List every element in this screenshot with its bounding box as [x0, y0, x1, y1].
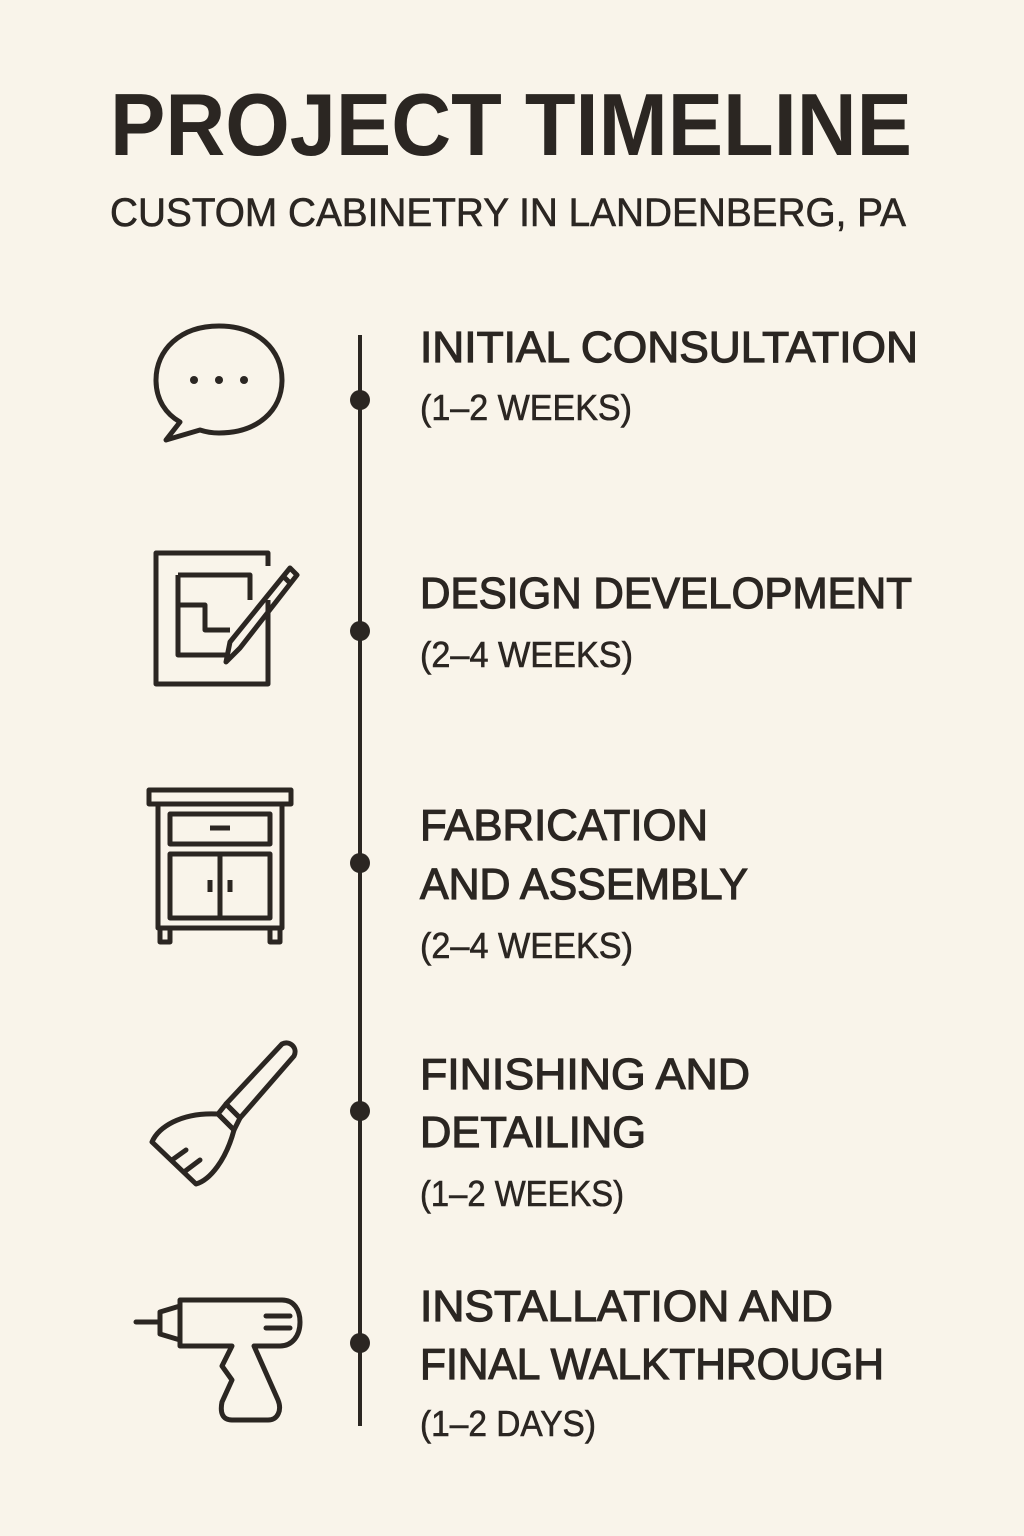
timeline line [350, 335, 370, 1426]
step 4 text: (1–2 WEEKS) [420, 1173, 624, 1214]
step 1 text: (1–2 WEEKS) [420, 387, 632, 428]
step 2 text: DESIGN DEVELOPMENT [420, 569, 912, 618]
step 5 text: (1–2 DAYS) [420, 1403, 596, 1444]
icon: speech bubble [156, 326, 282, 440]
icon: paintbrush [152, 1043, 295, 1184]
step 4 text [420, 1050, 750, 1214]
icon: drill [136, 1300, 300, 1420]
title: PROJECT TIMELINE [110, 75, 912, 174]
step 1 text [420, 323, 918, 428]
subtitle: CUSTOM CABINETRY IN LANDENBERG, PA [110, 191, 906, 235]
step 5 text: INSTALLATION AND [420, 1282, 833, 1331]
step 4 text: DETAILING [420, 1108, 646, 1157]
step 1 text: INITIAL CONSULTATION [420, 323, 918, 372]
step 5 text: FINAL WALKTHROUGH [420, 1340, 884, 1389]
step 3 text: (2–4 WEEKS) [420, 925, 633, 966]
icon: cabinet [149, 790, 291, 942]
step 2 text: (2–4 WEEKS) [420, 634, 633, 675]
step 5 text [420, 1282, 884, 1444]
step 3 text [420, 801, 748, 966]
step 3 text: FABRICATION [420, 801, 708, 850]
icon: plan with pencil [156, 553, 297, 684]
step 2 text [420, 569, 912, 675]
step 4 text: FINISHING AND [420, 1050, 750, 1099]
step 3 text: AND ASSEMBLY [420, 860, 748, 909]
